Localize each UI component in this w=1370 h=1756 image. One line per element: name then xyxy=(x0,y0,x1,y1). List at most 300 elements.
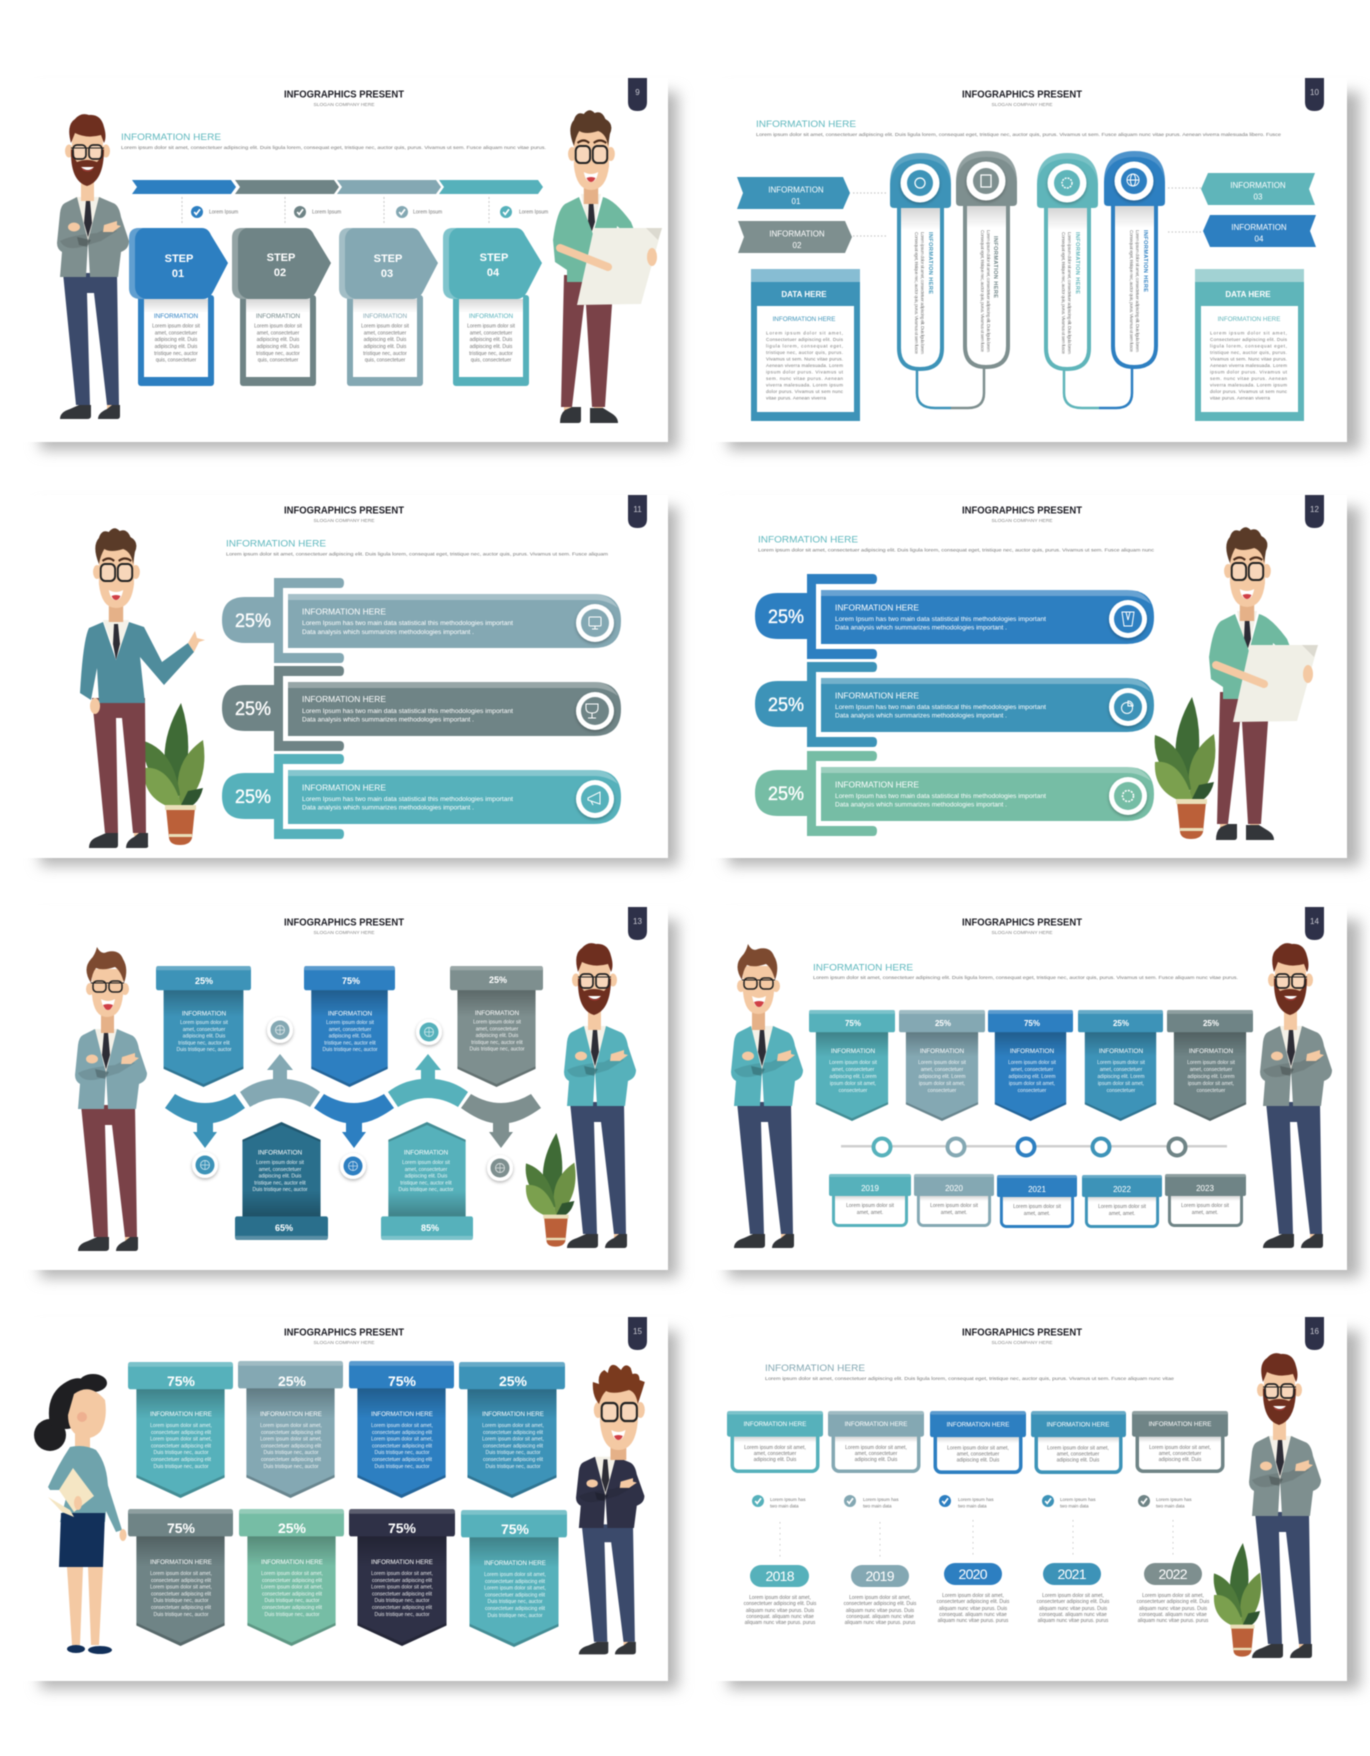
card 4: amet, consectetuer xyxy=(1057,1452,1100,1458)
banner 25% xyxy=(156,966,251,1087)
banner bottom 4: Lorem ipsum dolor sit amet, xyxy=(484,1572,546,1578)
page tab 10 xyxy=(1305,78,1324,111)
ribbon 01: INFORMATION xyxy=(768,186,824,194)
banner top 4: INFORMATION HERE xyxy=(482,1411,544,1418)
page tab 14 xyxy=(1305,907,1324,940)
banner 2: Lorem ipsum dolor sit xyxy=(918,1060,967,1066)
data box left: Consectetuer adipiscing elit. Duis xyxy=(766,337,844,342)
page tab 9: 9 xyxy=(635,88,640,97)
check labels xyxy=(191,206,548,218)
step 1: tristique nec, auctor xyxy=(154,351,198,357)
ribbon 01 xyxy=(737,177,850,209)
year card 2022: amet, amet. xyxy=(1109,1211,1135,1217)
year 2019: consequat. aliquam nunc vitae xyxy=(846,1614,914,1620)
banner 75% xyxy=(304,966,395,1087)
check labels xyxy=(752,1495,1192,1508)
slogan: SLOGAN COMPANY HERE xyxy=(314,1340,374,1345)
page tab 14: 14 xyxy=(1310,917,1319,926)
capsule 3: Lorem ipsum dolor sit amet, consectetuer adipiscing elit. Duis ligula lorem xyxy=(1067,232,1072,354)
banner top 3 xyxy=(349,1361,454,1498)
step 4: INFORMATION xyxy=(469,313,514,320)
step 4: STEP xyxy=(480,252,508,264)
panel: slide 14 timeline xyxy=(711,905,1360,1278)
banner bottom 4 xyxy=(461,1510,567,1647)
step 3: adipiscing elit. Duis xyxy=(364,344,407,350)
plant xyxy=(1155,697,1215,839)
banner 25%: adipiscing elit. Duis xyxy=(183,1034,226,1040)
banner 5: INFORMATION xyxy=(1189,1048,1234,1055)
check labels: Lorem Ipsum xyxy=(413,210,442,216)
banner bottom 2: Duis tristique nec, auctor xyxy=(264,1598,320,1604)
slogan: SLOGAN COMPANY HERE xyxy=(992,518,1052,523)
heading: INFORMATION HERE xyxy=(226,538,326,548)
title: INFOGRAPHICS PRESENT xyxy=(284,1328,404,1338)
banner top 3: Lorem ipsum dolor sit amet, xyxy=(371,1436,433,1442)
title: INFOGRAPHICS PRESENT xyxy=(284,90,404,100)
data box left: DATA HERE xyxy=(781,290,827,299)
slogan: SLOGAN COMPANY HERE xyxy=(314,930,374,935)
title: INFOGRAPHICS PRESENT xyxy=(962,506,1082,516)
panel: slide 16 years xyxy=(711,1317,1360,1689)
banner top 3: Duis tristique nec, auctor xyxy=(374,1450,430,1456)
banner 85%: 85% xyxy=(421,1223,439,1233)
slogan: SLOGAN COMPANY HERE xyxy=(992,930,1052,935)
year card 2022: 2022 xyxy=(1113,1185,1131,1194)
banner 4: adipiscing elit. Lorem xyxy=(1098,1074,1144,1080)
row 3 xyxy=(222,754,621,839)
banner top 1 xyxy=(128,1362,233,1498)
data box left: sem. nunc vitae purus. Aenean xyxy=(766,376,843,381)
row 1: INFORMATION HERE xyxy=(302,608,387,616)
banner bottom 1: Lorem ipsum dolor sit amet, xyxy=(150,1571,212,1577)
data box right: vitae purus. Aenean viverra xyxy=(1210,396,1270,400)
row 3: 25% xyxy=(768,784,804,805)
banner top 1: consectetuer adipiscing elit xyxy=(151,1430,212,1436)
banner 25% grey: adipiscing elit. Duis xyxy=(476,1033,519,1039)
title: INFOGRAPHICS PRESENT xyxy=(962,1328,1082,1338)
card 3: amet, consectetuer xyxy=(957,1452,1000,1458)
banner top 1: Lorem ipsum dolor sit amet, xyxy=(150,1423,212,1429)
row 2: Data analysis which summarizes methodologies important . xyxy=(835,712,1007,720)
banner 65%: adipiscing elit. Duis xyxy=(259,1174,302,1180)
check labels: Lorem Ipsum has xyxy=(770,1497,806,1502)
year 2019: 2019 xyxy=(866,1568,895,1584)
description: Lorem ipsum dolor sit amet, consectetuer adipiscing elit. Duis ligula lorem, consequat eget, tristique nec, auctor quis, purus. Vivamus ut sem. Fusce aliquam nunc vitae purus. xyxy=(813,975,1238,980)
banner 25%: INFORMATION xyxy=(182,1010,227,1018)
row 3: 25% xyxy=(235,787,271,808)
check labels: Lorem Ipsum xyxy=(312,210,341,216)
row 3: Data analysis which summarizes methodologies important . xyxy=(835,802,1007,808)
row 1: INFORMATION HERE xyxy=(835,604,920,612)
card 1 xyxy=(727,1411,823,1471)
banner 65% xyxy=(235,1122,328,1240)
data box left: Vivamus ut sem. Nunc vitae purus. xyxy=(766,356,843,362)
page tab 11: 11 xyxy=(633,505,642,514)
step 4: Lorem ipsum dolor sit xyxy=(467,324,516,330)
year 2019: consectetuer adipiscing elit. Duis xyxy=(844,1601,917,1607)
data box left: INFORMATION HERE xyxy=(773,316,835,323)
banner 4: Lorem ipsum dolor sit xyxy=(1097,1060,1146,1066)
banner 1: amet, consectetuer xyxy=(832,1067,875,1073)
capsule 2 xyxy=(956,151,1017,367)
banner 2: INFORMATION xyxy=(920,1048,965,1055)
year 2019 xyxy=(844,1565,917,1626)
year 2019: aliquam nunc vitae purus. Duis xyxy=(846,1608,915,1614)
description: Lorem ipsum dolor sit amet, consectetuer adipiscing elit. Duis ligula lorem, consequat eget, tristique nec, auctor quis, purus. Vivamus ut sem. Fusce aliquam nunc vitae purus. xyxy=(121,145,546,150)
plant xyxy=(144,703,204,845)
banner 85%: tristique nec, auctor elit xyxy=(400,1180,452,1186)
check labels: Lorem Ipsum xyxy=(209,210,238,216)
banner bottom 3: Lorem ipsum dolor sit amet, xyxy=(371,1571,433,1577)
data box left: ligula lorem, consequat eget, xyxy=(766,344,843,348)
row 2: Data analysis which summarizes methodologies important . xyxy=(302,716,474,724)
banner top 3: INFORMATION HERE xyxy=(371,1411,433,1418)
step 2: adipiscing elit. Duis xyxy=(257,337,300,343)
year 2018: aliquam nunc vitae purus. purus xyxy=(745,1620,816,1626)
year card 2021: 2021 xyxy=(1028,1185,1046,1194)
year card 2019: 2019 xyxy=(861,1184,879,1193)
step 2: Lorem ipsum dolor sit xyxy=(254,324,303,330)
banner 1: INFORMATION xyxy=(831,1048,876,1055)
banner 5: amet, consectetuer xyxy=(1190,1067,1233,1073)
capsule 3 xyxy=(1037,153,1098,369)
banner 5: adipiscing elit. Lorem xyxy=(1188,1074,1234,1080)
description: Lorem ipsum dolor sit amet, consectetuer adipiscing elit. Duis ligula lorem, consequat eget, tristique nec, auctor quis, purus. Vivamus ut sem. Fusce aliquam nunc vitae purus. Aenean viverra malesuada libero. Fusce xyxy=(756,132,1282,137)
row 2: 25% xyxy=(235,699,271,720)
check labels: two main data xyxy=(958,1504,987,1508)
banner bottom 2: Duis tristique nec, auctor xyxy=(264,1612,320,1618)
banner 1: consectetuer xyxy=(839,1088,868,1094)
year 2021: aliquam nunc vitae purus. purus xyxy=(1038,1618,1109,1624)
card 1: amet, consectetuer xyxy=(754,1451,797,1457)
year 2021 xyxy=(1037,1563,1110,1624)
page tab 12: 12 xyxy=(1310,505,1319,514)
step 2: 02 xyxy=(274,267,286,279)
banner bottom 4: 75% xyxy=(501,1521,530,1537)
capsule 3: INFORMATION HERE xyxy=(1074,232,1080,294)
year card 2023: Lorem ipsum dolor sit xyxy=(1181,1203,1230,1209)
banner 4: ipsum dolor sit amet, xyxy=(1098,1081,1144,1087)
data box right: Lorem ipsum dolor sit amet, xyxy=(1210,330,1287,336)
step 4: adipiscing elit. Duis xyxy=(470,344,513,350)
banner bottom 2: consectetuer adipiscing elit xyxy=(262,1578,323,1584)
banner top 3: 75% xyxy=(388,1373,417,1389)
banner 1: 75% xyxy=(845,1019,861,1028)
banner 85%: Lorem ipsum dolor sit xyxy=(402,1160,451,1166)
banner 65%: tristique nec, auctor elit xyxy=(254,1180,306,1186)
step 2: quis, consectetuer xyxy=(258,358,299,364)
banner 4: amet, consectetuer xyxy=(1100,1067,1143,1073)
row 1: 25% xyxy=(235,611,271,632)
step 1: Lorem ipsum dolor sit xyxy=(152,324,201,330)
year 2020: 2020 xyxy=(958,1566,988,1582)
banner top 2: Lorem ipsum dolor sit amet, xyxy=(260,1436,322,1442)
year card 2019: Lorem ipsum dolor sit xyxy=(846,1203,895,1209)
page tab 9 xyxy=(628,78,647,111)
step 3 xyxy=(339,228,438,386)
banner 3: amet, consectetuer xyxy=(1011,1067,1054,1073)
banner top 3: Lorem ipsum dolor sit amet, xyxy=(371,1423,433,1429)
step 1: INFORMATION xyxy=(154,313,199,320)
banner 85%: INFORMATION xyxy=(404,1150,449,1156)
heading: INFORMATION HERE xyxy=(758,534,858,544)
page tab 13 xyxy=(628,907,647,940)
step 4: adipiscing elit. Duis xyxy=(470,337,513,343)
banner 1: Lorem ipsum dolor sit xyxy=(829,1060,878,1066)
banner 3: 75% xyxy=(1024,1019,1040,1028)
data box right xyxy=(1195,269,1304,421)
slogan: SLOGAN COMPANY HERE xyxy=(992,1340,1052,1345)
capsule 4: Consequat eget, tristique nec, auctor quis, purus. Vivamus ut sem fusce xyxy=(1129,230,1134,352)
banner top 1: Duis tristique nec, auctor xyxy=(153,1464,209,1470)
data box right: Aenean viverra malesuada. Lorem xyxy=(1210,363,1287,368)
title: INFOGRAPHICS PRESENT xyxy=(962,918,1082,928)
data box left: viverra malesuada. Lorem ipsum xyxy=(766,382,843,388)
character: man left xyxy=(731,944,803,1248)
banner bottom 1: INFORMATION HERE xyxy=(150,1559,212,1566)
icon circles xyxy=(192,1017,513,1181)
page tab 16 xyxy=(1305,1317,1324,1350)
heading: INFORMATION HERE xyxy=(756,118,856,129)
check labels: Lorem Ipsum xyxy=(519,210,548,216)
check labels: Lorem Ipsum has xyxy=(863,1497,899,1502)
card 5: Lorem ipsum dolor sit amet, xyxy=(1149,1445,1211,1451)
capsule 3: Consequat eget, tristique nec, auctor quis, purus. Vivamus ut sem fusce xyxy=(1061,232,1066,354)
capsule 2: INFORMATION HERE xyxy=(992,236,998,298)
data box left: dolor purus. Vivamus ut sem nunc xyxy=(766,389,844,394)
banner bottom 3: consectetuer adipiscing elit xyxy=(372,1592,433,1598)
character: man dark suit xyxy=(576,1365,645,1654)
character: man left xyxy=(75,947,147,1251)
check labels: two main data xyxy=(1060,1504,1089,1508)
row 1: 25% xyxy=(768,607,804,628)
banner bottom 4: consectetuer adipiscing elit xyxy=(485,1592,546,1598)
step 3: INFORMATION xyxy=(363,313,408,320)
banner 2: amet, consectetuer xyxy=(921,1067,964,1073)
banner 5: Lorem ipsum dolor sit xyxy=(1187,1060,1236,1066)
row 3: INFORMATION HERE xyxy=(302,784,387,792)
page tab 11 xyxy=(628,495,647,528)
banner bottom 3: consectetuer adipiscing elit xyxy=(372,1605,433,1611)
banner bottom 1: Duis tristique nec, auctor xyxy=(153,1612,209,1618)
row 2: INFORMATION HERE xyxy=(835,692,920,700)
panel: slide 11 percent rows xyxy=(24,495,678,866)
data box right: dolor purus. Vivamus ut sem nunc xyxy=(1210,389,1288,394)
year 2021: Lorem ipsum dolor sit amet, xyxy=(1042,1593,1104,1599)
banner 75%: amet, consectetuer xyxy=(329,1027,372,1033)
heading: INFORMATION HERE xyxy=(121,131,221,142)
year 2020: aliquam nunc vitae purus. purus xyxy=(938,1618,1009,1624)
step 3: adipiscing elit. Duis xyxy=(364,337,407,343)
data box right: Consectetuer adipiscing elit. Duis xyxy=(1210,337,1288,342)
slogan: SLOGAN COMPANY HERE xyxy=(314,518,374,523)
banner top 1: Duis tristique nec, auctor xyxy=(153,1450,209,1456)
banner 75%: Duis tristique nec, auctor xyxy=(322,1047,378,1053)
arrow chevrons xyxy=(132,180,543,194)
banner bottom 1: consectetuer adipiscing elit xyxy=(151,1578,212,1584)
banner 4: consectetuer xyxy=(1107,1088,1136,1094)
data box right: viverra malesuada. Lorem ipsum xyxy=(1210,382,1287,388)
banner 25% grey: amet, consectetuer xyxy=(476,1026,519,1032)
step 3: amet, consectetuer xyxy=(364,330,407,336)
character: bearded man right xyxy=(1260,943,1332,1248)
banner bottom 4: consectetuer adipiscing elit xyxy=(485,1606,546,1612)
data box right: tristique nec, auctor quis, purus. xyxy=(1210,350,1287,355)
banner 85%: amet, consectetuer xyxy=(405,1167,448,1173)
banner 25%: Duis tristique nec, auctor xyxy=(176,1047,232,1053)
banner bottom 4: Duis tristique nec, auctor xyxy=(487,1599,543,1605)
banner 3 xyxy=(988,1010,1073,1121)
check labels: Lorem Ipsum has xyxy=(1060,1497,1096,1502)
page tab 15: 15 xyxy=(633,1327,642,1336)
plant xyxy=(526,1133,576,1247)
banner 75%: INFORMATION xyxy=(328,1010,373,1018)
panel: slide 13 wave flow xyxy=(24,905,678,1278)
banner top 3: consectetuer adipiscing elit xyxy=(372,1444,433,1450)
ribbon 03: INFORMATION xyxy=(1230,181,1286,190)
step 3: tristique nec, auctor xyxy=(363,351,407,357)
banner top 1: 75% xyxy=(167,1373,196,1389)
banner top 2: Duis tristique nec, auctor xyxy=(263,1464,319,1470)
year card 2020: 2020 xyxy=(945,1184,963,1193)
year 2018: Lorem ipsum dolor sit amet, xyxy=(749,1595,811,1601)
year 2020: consequat. aliquam nunc vitae xyxy=(939,1612,1007,1618)
banner 5 xyxy=(1167,1010,1253,1121)
panel: slide 9 steps xyxy=(24,78,678,450)
dotted connectors xyxy=(853,188,1201,236)
banner top 2: 25% xyxy=(278,1373,307,1389)
row 2 xyxy=(755,662,1154,747)
banner top 3: consectetuer adipiscing elit xyxy=(372,1430,433,1436)
banner bottom 4: INFORMATION HERE xyxy=(484,1560,546,1567)
slogan: SLOGAN COMPANY HERE xyxy=(992,102,1052,107)
row 2: INFORMATION HERE xyxy=(302,695,387,704)
banner bottom 1: consectetuer adipiscing elit xyxy=(151,1605,212,1611)
card 3 xyxy=(930,1411,1026,1472)
year card 2020 xyxy=(914,1174,994,1226)
banner 85%: adipiscing elit. Duis xyxy=(405,1174,448,1180)
year 2022: 2022 xyxy=(1158,1566,1188,1582)
year 2021: consectetuer adipiscing elit. Duis xyxy=(1037,1599,1110,1605)
page tab 16: 16 xyxy=(1310,1327,1319,1336)
banner 25%: Lorem ipsum dolor sit xyxy=(180,1020,229,1026)
year card 2020: amet, amet. xyxy=(941,1210,967,1216)
step 2: adipiscing elit. Duis xyxy=(257,344,300,350)
page tab 15 xyxy=(628,1317,647,1350)
banner top 4: Lorem ipsum dolor sit amet, xyxy=(482,1423,544,1429)
card 4: INFORMATION HERE xyxy=(1047,1422,1109,1428)
character: pointing man xyxy=(80,528,205,848)
page tab 13: 13 xyxy=(633,917,642,926)
wave arrows xyxy=(165,1054,541,1148)
banner bottom 3: Duis tristique nec, auctor xyxy=(374,1598,430,1604)
ribbon 04 xyxy=(1203,215,1316,247)
card 5: INFORMATION HERE xyxy=(1149,1421,1211,1428)
banner bottom 4: Duis tristique nec, auctor xyxy=(487,1613,543,1619)
card 2: amet, consectetuer xyxy=(855,1451,898,1457)
title: INFOGRAPHICS PRESENT xyxy=(962,90,1082,100)
step 1 xyxy=(129,228,228,386)
banner 75%: Lorem ipsum dolor sit xyxy=(326,1020,375,1026)
row 1 xyxy=(755,574,1154,659)
banner bottom 1: Lorem ipsum dolor sit amet, xyxy=(150,1584,212,1590)
year card 2022: Lorem ipsum dolor sit xyxy=(1098,1204,1147,1210)
data box right: INFORMATION HERE xyxy=(1218,316,1280,323)
year card 2021: Lorem ipsum dolor sit xyxy=(1013,1204,1062,1210)
banner top 2: Duis tristique nec, auctor xyxy=(263,1450,319,1456)
description: Lorem ipsum dolor sit amet, consectetuer adipiscing elit. Duis ligula lorem, consequat eget, tristique nec, auctor quis, purus. Vivamus ut sem. Fusce aliquam nunc xyxy=(758,548,1155,552)
banner bottom 2: Lorem ipsum dolor sit amet, xyxy=(261,1584,323,1590)
row 3: Lorem Ipsum has two main data statistical this methodologies important xyxy=(302,796,513,803)
banner 85% xyxy=(381,1122,473,1240)
banner top 2: INFORMATION HERE xyxy=(260,1411,322,1418)
data box left: Aenean viverra malesuada. Lorem xyxy=(766,363,843,368)
row 1 xyxy=(222,578,621,663)
banner bottom 2: 25% xyxy=(278,1520,307,1536)
banner 4: INFORMATION xyxy=(1099,1048,1144,1055)
year 2018: 2018 xyxy=(766,1568,795,1584)
banner bottom 3 xyxy=(349,1509,455,1646)
banner top 2: consectetuer adipiscing elit xyxy=(261,1444,322,1450)
row 2 xyxy=(222,666,621,751)
page tab 10: 10 xyxy=(1310,88,1319,97)
capsule 2: Lorem ipsum dolor sit amet, consectetuer adipiscing elit. Duis ligula lorem xyxy=(986,230,991,352)
check labels: two main data xyxy=(770,1504,799,1508)
banner 2: adipiscing elit. Lorem xyxy=(919,1074,965,1080)
banner top 4: consectetuer adipiscing elit xyxy=(483,1444,544,1450)
banner bottom 3: INFORMATION HERE xyxy=(371,1559,433,1566)
banner bottom 4: Lorem ipsum dolor sit amet, xyxy=(484,1586,546,1592)
banner top 4: Duis tristique nec, auctor xyxy=(485,1464,541,1470)
step 4: tristique nec, auctor xyxy=(469,351,513,357)
card 4: adipiscing elit. Duis xyxy=(1057,1458,1100,1464)
banner top 1: Lorem ipsum dolor sit amet, xyxy=(150,1436,212,1442)
step 4: 04 xyxy=(487,267,500,279)
banner 25% grey: 25% xyxy=(489,975,507,985)
data box left: Lorem ipsum dolor sit amet, xyxy=(766,330,843,336)
ribbon 02: 02 xyxy=(793,241,802,250)
banner bottom 1: 75% xyxy=(167,1520,196,1536)
banner 25% grey: Lorem ipsum dolor sit xyxy=(473,1020,522,1026)
card 3: INFORMATION HERE xyxy=(947,1422,1009,1428)
step 2 xyxy=(232,228,331,386)
row 1: Data analysis which summarizes methodologies important . xyxy=(835,624,1007,632)
banner bottom 1: consectetuer adipiscing elit xyxy=(151,1592,212,1598)
banner top 4: 25% xyxy=(499,1373,528,1389)
panel: slide 12 percent rows xyxy=(711,495,1360,866)
year 2018: consequat. aliquam nunc vitae xyxy=(746,1614,814,1620)
banner bottom 1 xyxy=(128,1509,233,1646)
banner 5: 25% xyxy=(1203,1019,1219,1028)
character: bearded man xyxy=(1249,1353,1321,1658)
year 2021: aliquam nunc vitae purus. Duis xyxy=(1039,1606,1108,1612)
description: Lorem ipsum dolor sit amet, consectetuer adipiscing elit. Duis ligula lorem, consequat eget, tristique nec, auctor quis, purus. Vivamus ut sem. Fusce aliquam xyxy=(226,552,608,556)
banner top 2: consectetuer adipiscing elit xyxy=(261,1430,322,1436)
year 2022: consequat. aliquam nunc vitae xyxy=(1139,1612,1207,1618)
character: woman xyxy=(34,1374,126,1654)
dotted guides xyxy=(182,197,489,225)
ribbon 01: 01 xyxy=(792,197,801,206)
banner 2: ipsum dolor sit amet, xyxy=(919,1081,965,1087)
banner 1 xyxy=(809,1010,895,1121)
banner 65%: 65% xyxy=(275,1223,293,1233)
step 1: quis, consectetuer xyxy=(156,358,197,364)
banner bottom 2 xyxy=(239,1509,344,1646)
banner 3: consectetuer xyxy=(1018,1088,1047,1094)
card 4 xyxy=(1031,1411,1126,1472)
card 2: adipiscing elit. Duis xyxy=(855,1457,898,1463)
card 4: Lorem ipsum dolor sit amet, xyxy=(1047,1446,1109,1452)
